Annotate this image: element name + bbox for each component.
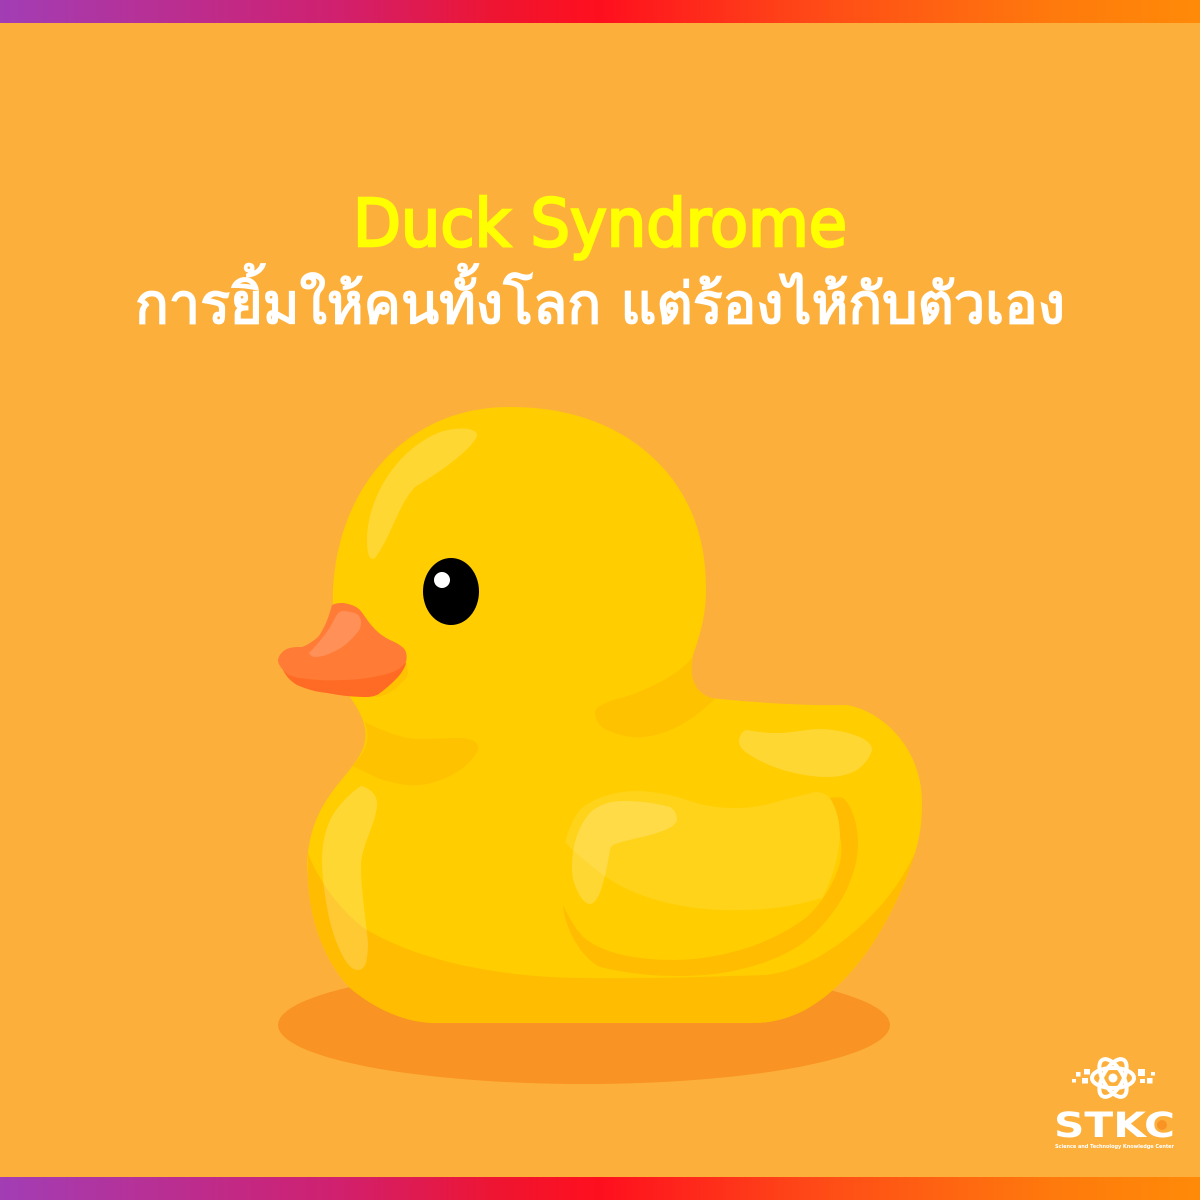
logo tagline: Science and Technology Knowledge Center: [1055, 1144, 1175, 1150]
wing lighter area: [565, 791, 840, 910]
rubber duck illustration: [278, 407, 922, 1084]
tail gloss: [739, 729, 872, 777]
logo atom icon: [1072, 1055, 1155, 1101]
top gradient bar: [0, 0, 1200, 23]
logo wordmark: STKC: [1054, 1106, 1175, 1146]
body lower shade: [308, 853, 915, 1023]
wing gloss: [572, 801, 677, 904]
logo: STKC: [1054, 1055, 1175, 1150]
chest gloss: [322, 786, 377, 970]
eye: [423, 558, 479, 625]
head gloss: [367, 429, 477, 559]
beak: [278, 603, 408, 697]
bottom gradient bar: [0, 1177, 1200, 1200]
title: Duck Syndrome: Duck Syndrome: [353, 185, 847, 262]
logo orange dot: [1157, 1120, 1167, 1130]
neck shade left: [352, 722, 478, 785]
neck shade right: [595, 657, 715, 737]
duck shadow: [278, 966, 890, 1084]
subtitle in Thai: การยิ้มให้คนทั้งโลก แต่ร้องไห้กับตัวเอง: [135, 263, 1065, 337]
duck body: [307, 407, 922, 1023]
wing shade: [563, 797, 858, 976]
